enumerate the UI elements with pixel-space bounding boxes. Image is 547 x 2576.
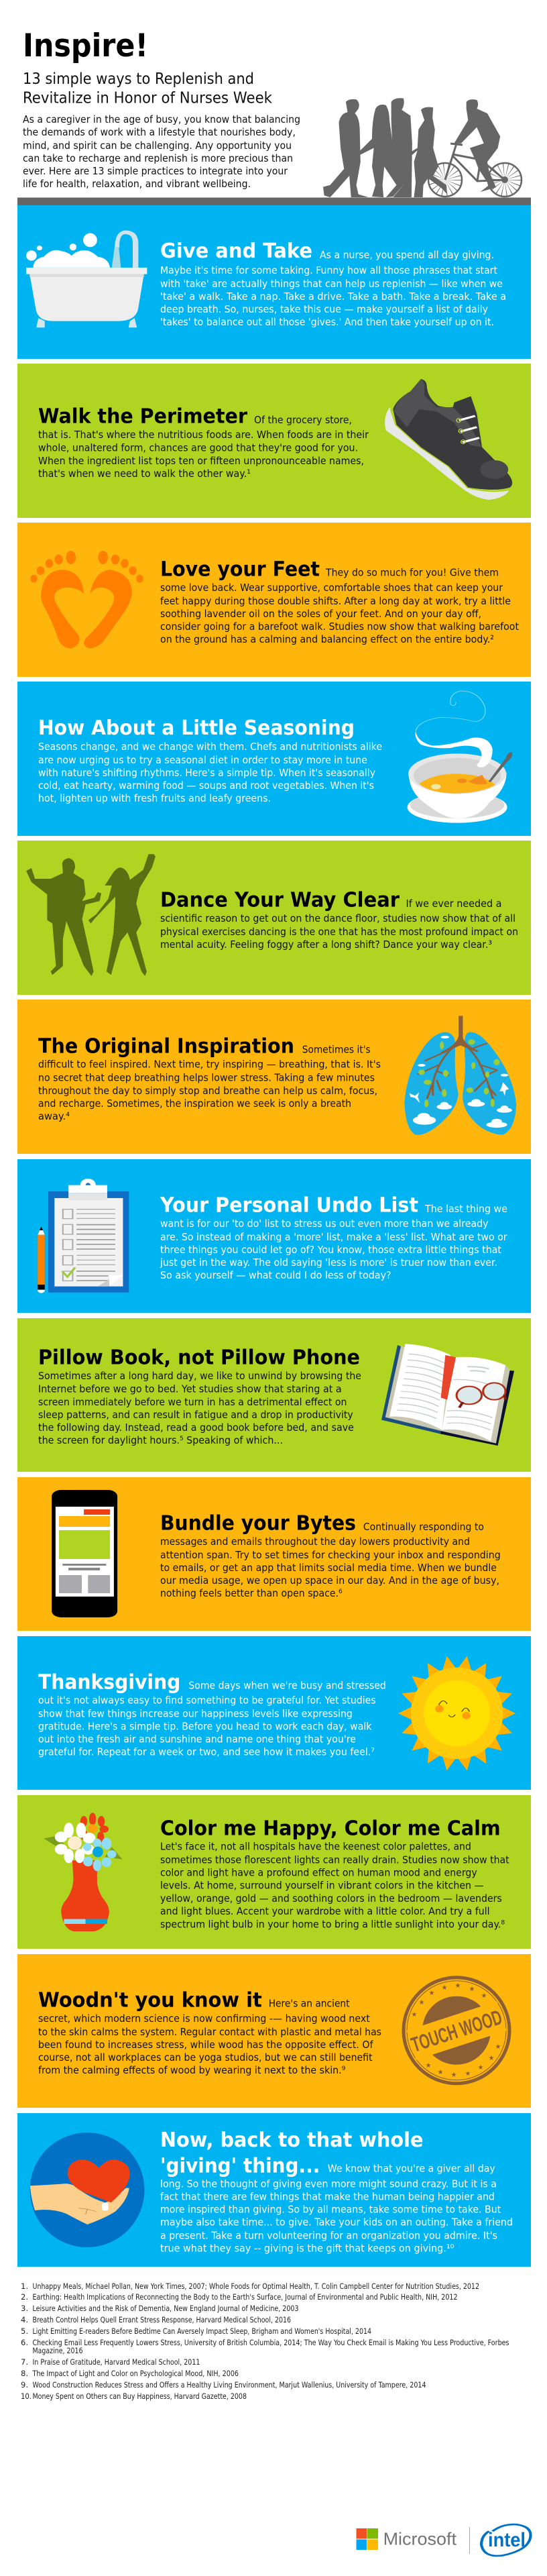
body text: with nature's shifting rhythms. Here's a simple tip. When it's seasonally: [38, 767, 375, 779]
references list: 9.: [21, 2380, 28, 2390]
subtitle: [23, 69, 272, 107]
icon: vase with flowers: [44, 1813, 122, 1931]
body text: gratitude. Here's a simple tip. Before you head to work each day, walk: [38, 1721, 371, 1733]
body text: grateful for. Repeat for a week or two, and see how it makes you feel.⁷: [38, 1746, 375, 1758]
body text: to the skin calms the system. Regular contact with plastic and metal has: [38, 2026, 381, 2038]
body text: the following day. Instead, read a good book before bed, and save: [38, 1421, 354, 1434]
heading: How About a Little Seasoning: [38, 716, 355, 740]
body text: soothing lavender oil on the soles of your feet. And on your day off,: [160, 608, 481, 620]
heading: Your Personal Undo List: [160, 1194, 418, 1218]
body text: We know that you're a giver all day: [328, 2163, 495, 2175]
panel: back to giving: [17, 2113, 531, 2267]
body text: the screen for daylight hours.⁵ Speaking of which...: [38, 1434, 283, 1446]
body text: cold, eat hearty, warming food — soups and root vegetables. When it's: [38, 780, 374, 792]
icon: touch wood stamp: ★: [412, 2011, 418, 2019]
body text: [160, 2163, 513, 2255]
panel: thanksgiving: [17, 1636, 531, 1790]
body text: just get in the way. The old saying 'less is more' is truer now than ever.: [160, 1256, 497, 1269]
body text: 'take' a walk. Take a nap. Take a drive. Take a bath. Take a break. Take a: [160, 290, 506, 303]
body text: and light blues. Accent your wardrobe with a little color. And try a full: [160, 1905, 490, 1917]
body text: and recharge. Sometimes, the inspiration we seek is only a breath: [38, 1097, 351, 1110]
heading: Love your Feet: [160, 557, 320, 581]
icon: touch wood stamp: ★: [442, 1984, 448, 1992]
body text: difficult to feel inspired. Next time, try inspiring — breathing, that is. It's: [38, 1059, 381, 1071]
body text: throughout the day to simply stop and breathe can help us calm, focus,: [38, 1085, 377, 1097]
heading: [160, 2129, 424, 2178]
body text: Let's face it, not all hospitals have the keenest color palettes, and: [160, 1841, 471, 1853]
panel: color me happy: [17, 1795, 531, 1949]
body text: scientific reason to get out on the dance floor, studies now show that of all: [160, 912, 515, 924]
icon: open book with glasses: [381, 1344, 514, 1446]
references list: 2.: [21, 2292, 28, 2302]
body text: [38, 1680, 386, 1758]
heading: Dance Your Way Clear: [160, 889, 400, 912]
body text: physical exercises dancing is the one that has the most profound impact on: [160, 926, 518, 938]
references list: Earthing: Health Implications of Reconnecting the Body to the Earth's Surface, Journal of Environmental and Public Health, NIH, 2012: [32, 2292, 457, 2302]
references list: 3.: [21, 2304, 28, 2313]
body text: Continually responding to: [363, 1521, 484, 1533]
icon: people silhouette walking with bicycle: [323, 98, 522, 197]
body text: show that few things increase our happiness levels like expressing: [38, 1708, 353, 1720]
body text: [160, 898, 518, 951]
body text: When the ingredient list tops ten or fifteen unpronounceable names,: [38, 455, 364, 467]
intro text: [23, 113, 300, 190]
body text: messages and emails throughout the day lowers productivity and: [160, 1536, 470, 1548]
references list: 7.: [21, 2357, 28, 2367]
body text: Here's an ancient: [269, 1998, 350, 2010]
body text: Internet before we go to bed. Yet studies show that staring at a: [38, 1383, 342, 1395]
body text: [38, 1044, 381, 1122]
references list: In Praise of Gratitude, Harvard Medical School, 2011: [32, 2357, 200, 2367]
body text: out it's not always easy to find something to be grateful for. Yet studies: [38, 1695, 376, 1707]
references list: The Impact of Light and Color on Psychological Mood, NIH, 2006: [32, 2369, 239, 2378]
body text: a present. Take a turn volunteering for an organization you admire. It's: [160, 2229, 497, 2241]
subtitle: 13 simple ways to Replenish and: [23, 69, 254, 88]
body text: deep breath. So, nurses, take this cue — make yourself a list of daily: [160, 303, 488, 315]
body text: no secret that deep breathing helps lower stress. Taking a few minutes: [38, 1072, 375, 1084]
references list: 8.: [21, 2369, 28, 2378]
icon: bowl of soup: [408, 691, 512, 823]
icon: smiling sun: [398, 1656, 515, 1770]
body text: Maybe it's time for some taking. Funny how all those phrases that start: [160, 264, 497, 276]
body text: three things you could let go of? You know, those extra little things that: [160, 1244, 501, 1256]
body text: [160, 1841, 509, 1931]
body text: Some days when we're busy and stressed: [188, 1680, 386, 1692]
panel: love your feet: [17, 523, 531, 677]
panel: dance: [17, 841, 531, 995]
ground bar: [17, 197, 531, 205]
body text: sleep patterns, and can result in fatigue and a drop in productivity: [38, 1409, 353, 1421]
body text: 'takes' to balance out all those 'gives.' And then take yourself up on it.: [160, 316, 494, 328]
references list: Leisure Activities and the Risk of Dementia, New England Journal of Medicine, 2003: [32, 2304, 299, 2313]
body text: are now urging us to try a seasonal diet in order to stay more in tune: [38, 754, 367, 766]
heading: Pillow Book, not Pillow Phone: [38, 1346, 360, 1369]
body text: our media usage, we open up space in our day. And in the age of busy,: [160, 1574, 499, 1587]
heading: Walk the Perimeter: [38, 405, 247, 429]
body text: The last thing we: [424, 1203, 507, 1215]
icon: lungs with tree, clouds and birds: [404, 1016, 516, 1135]
body text: They do so much for you! Give them: [325, 567, 499, 579]
references list: 4.: [21, 2315, 28, 2324]
heading: Now, back to that whole: [160, 2129, 424, 2152]
body text: Sometimes after a long hard day, we like to unwind by browsing the: [38, 1370, 361, 1382]
body text: Seasons change, and we change with them. Chefs and nutritionists alike: [38, 741, 382, 753]
body text: Sometimes it's: [302, 1044, 371, 1056]
references list: [21, 2282, 509, 2401]
body text: [38, 1370, 361, 1446]
references list: 10.: [21, 2392, 32, 2401]
body text: fact that there are few things that make the human being happier and: [160, 2191, 495, 2203]
body text: more inspired than giving. So by all means, take some time to take. But: [160, 2204, 501, 2216]
body text: out into the fresh air and sunshine and name one thing that you're: [38, 1733, 356, 1746]
body text: mental acuity. Feeling foggy after a long shift? Dance your way clear.³: [160, 938, 492, 951]
intro text: ever. Here are 13 simple practices to integrate into your: [23, 165, 288, 177]
icon: touch wood stamp: [404, 1978, 509, 2084]
body text: hot, lighten up with fresh fruits and leafy greens.: [38, 792, 271, 804]
body text: whole, unaltered form, chances are good that they're good for you.: [38, 442, 358, 454]
heading: Color me Happy, Color me Calm: [160, 1817, 501, 1841]
references list: Money Spent on Others can Buy Happiness, Harvard Gazette, 2008: [32, 2392, 247, 2401]
panel: personal undo list: [17, 1159, 531, 1313]
intro text: life for health, relaxation, and vibrant wellbeing.: [23, 178, 251, 190]
icon: clipboard and pencil: [38, 1179, 129, 1293]
intro text: mind, and spirit can be challenging. Any opportunity you: [23, 140, 292, 152]
heading: Thanksgiving: [38, 1670, 180, 1694]
icon: smartphone: [52, 1490, 117, 1617]
panel: original inspiration: [17, 1000, 531, 1154]
body text: that's when we need to walk the other way.¹: [38, 468, 251, 480]
icon: touch wood stamp: ★: [469, 1986, 475, 1993]
body text: long. So the thought of giving even more might sound crazy. But it is a: [160, 2178, 497, 2190]
icon: touch wood stamp: ★: [426, 2062, 432, 2070]
heading: The Original Inspiration: [38, 1034, 294, 1058]
panel: give and take: [17, 205, 531, 359]
logo: Microsoft: Microsoft: [383, 2529, 457, 2549]
body text: feet happy during those double shifts. After a long day at work, try a little: [160, 595, 511, 607]
body text: from the calming effects of wood by wearing it next to the skin.⁹: [38, 2064, 345, 2076]
body text: color and light have a profound effect on human mood and energy: [160, 1867, 477, 1879]
body text: want is for our 'to do' list to stress us out even more than we already: [160, 1218, 488, 1230]
references list: 1.: [21, 2282, 28, 2291]
icon: touch wood stamp: ★: [455, 1982, 461, 1990]
icon: touch wood stamp: ★: [451, 2072, 457, 2079]
subtitle: Revitalize in Honor of Nurses Week: [23, 89, 272, 107]
body text: course, not all workplaces can be yoga studios, but we can still benefit: [38, 2051, 373, 2063]
body text: that is. That's where the nutritious foods are. When foods are in their: [38, 429, 369, 441]
body text: on the ground has a calming and balancing effect on the entire body.²: [160, 633, 494, 645]
body text: some love back. Wear supportive, comfortable shoes that can keep your: [160, 582, 503, 594]
body text: spectrum light bulb in your home to bring a little sunlight into your day.⁸: [160, 1919, 505, 1931]
body text: consider going for a barefoot walk. Studies now show that walking barefoot: [160, 621, 519, 633]
references list: Breath Control Helps Quell Errant Stress Response, Harvard Medical School, 2016: [32, 2315, 291, 2324]
logo: Intel: [481, 2524, 531, 2556]
body text: [38, 414, 369, 480]
logo: Intel: intel: [488, 2529, 526, 2551]
body text: secret, which modern science is now confirming -— having wood next: [38, 2012, 370, 2025]
icon: running shoe: [385, 379, 512, 500]
panel: bundle your bytes: [17, 1477, 531, 1631]
body text: to emails, or get an app that limits social media time. When we bundle: [160, 1562, 497, 1574]
body text: As a nurse, you spend all day giving.: [320, 249, 494, 261]
references list: Wood Construction Reduces Stress and Offers a Healthy Living Environment, Marjut Wallenius, University of Tampere, 2014: [32, 2380, 426, 2390]
body text: [160, 1203, 507, 1281]
body text: If we ever needed a: [406, 898, 501, 910]
heading: 'giving' thing...: [160, 2154, 320, 2178]
heading: Woodn't you know it: [38, 1988, 262, 2012]
intro text: As a caregiver in the age of busy, you know that balancing: [23, 113, 300, 125]
body text: true what they say -- giving is the gift that keeps on giving.¹⁰: [160, 2243, 454, 2255]
intro text: can take to recharge and replenish is more precious than: [23, 152, 293, 164]
icon: hand holding heart: [29, 2133, 145, 2247]
body text: are. So instead of making a 'more' list, make a 'less' list. What are two or: [160, 1231, 507, 1243]
references list: Magazine, 2016: [32, 2346, 83, 2355]
icon: touch wood stamp: ★: [495, 2043, 501, 2051]
body text: with 'take' are actually things that can help us replenish — like when we: [160, 278, 503, 290]
references list: 5.: [21, 2326, 28, 2336]
body text: maybe also take time... to give. Take your kids on an outing. Take a friend: [160, 2216, 513, 2229]
icon: dancing couple silhouette: [26, 854, 156, 976]
icon: bathtub: [26, 230, 147, 327]
body text: [160, 249, 506, 328]
body text: been found to increases stress, while wood has the opposite effect. Of: [38, 2039, 373, 2051]
body text: [160, 567, 519, 645]
body text: attention span. Try to set times for checking your inbox and responding: [160, 1549, 501, 1561]
body text: yellow, orange, gold — and soothing colors in the bedroom — lavenders: [160, 1892, 502, 1904]
logo: Microsoft: [357, 2528, 457, 2550]
body text: Of the grocery store,: [254, 414, 352, 426]
panel: seasoning: [17, 682, 531, 836]
references list: Light Emitting E-readers Before Bedtime Can Aversely Impact Sleep, Brigham and Women's Hospital, 2014: [32, 2326, 371, 2336]
body text: sometimes those florescent lights can really drain. Studies now show that: [160, 1854, 509, 1866]
title: Inspire!: [23, 28, 148, 64]
body text: [160, 1521, 501, 1599]
intro text: the demands of work with a lifestyle that nourishes body,: [23, 126, 296, 138]
panel: woodn't you know it: [17, 1954, 531, 2108]
body text: screen immediately before we turn in has a detrimental effect on: [38, 1396, 347, 1408]
body text: levels. At home, surround yourself in vibrant colors in the kitchen —: [160, 1880, 484, 1892]
icon: touch wood stamp: ★: [429, 1990, 435, 1997]
icon: touch wood stamp: ★: [489, 2055, 495, 2062]
references list: 6.: [21, 2338, 28, 2347]
body text: nothing feels better than open space.⁶: [160, 1587, 343, 1599]
icon: touch wood stamp: ★: [438, 2069, 444, 2076]
icon: footprints forming a heart: [30, 551, 143, 649]
icon: touch wood stamp: ★: [481, 1992, 487, 2000]
heading: Give and Take: [160, 239, 312, 263]
panel: pillow book: [17, 1318, 531, 1472]
body text: So ask yourself — what could I do less of today?: [160, 1269, 391, 1281]
icon: touch wood stamp: ★: [465, 2070, 471, 2078]
icon: touch wood stamp: ★: [419, 1999, 425, 2006]
panel: walk the perimeter: [17, 364, 531, 518]
body text: [38, 741, 382, 804]
body text: [38, 1998, 381, 2076]
icon: touch wood stamp: ★: [478, 2064, 484, 2072]
heading: Bundle your Bytes: [160, 1512, 356, 1536]
body text: away.⁴: [38, 1110, 70, 1122]
